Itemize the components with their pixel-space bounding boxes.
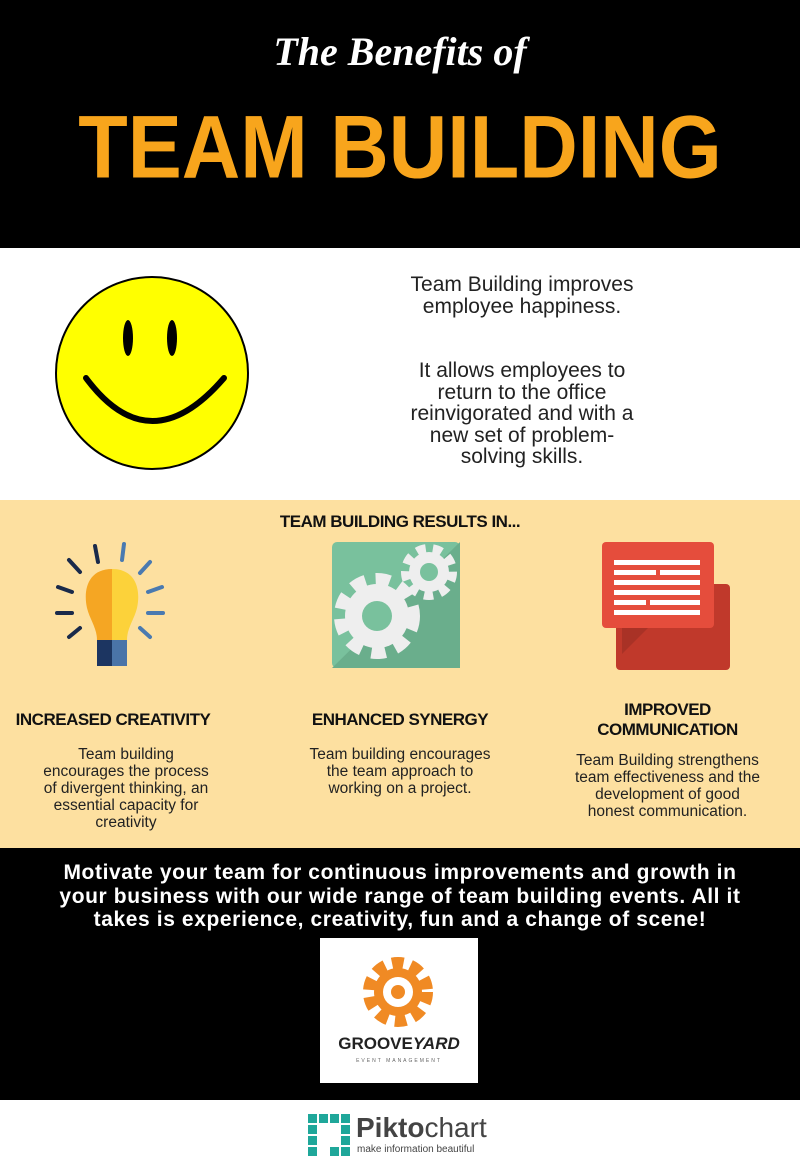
panel: happiness bbox=[0, 248, 800, 500]
column: communication bbox=[575, 700, 760, 820]
column: synergy bbox=[310, 710, 490, 797]
column: creativity: encourages the process bbox=[43, 763, 209, 780]
header bbox=[0, 0, 800, 248]
title: TEAM BUILDING bbox=[78, 98, 722, 197]
text block: solving skills. bbox=[461, 445, 583, 468]
column: creativity: essential capacity for bbox=[54, 797, 198, 814]
text block bbox=[59, 861, 741, 931]
footer: piktochart: Piktochart bbox=[356, 1112, 487, 1143]
text block bbox=[410, 273, 634, 468]
column: communication: team effectiveness and the bbox=[575, 769, 760, 786]
heading: TEAM BUILDING RESULTS IN... bbox=[280, 512, 520, 531]
icon: smiley bbox=[55, 276, 249, 470]
text block: return to the office bbox=[438, 380, 606, 404]
text block: takes is experience, creativity, fun and a change of scene! bbox=[94, 908, 706, 931]
text block: new set of problem- bbox=[430, 424, 614, 446]
icon: light bulb bbox=[55, 542, 165, 666]
column: communication: Team Building strengthens bbox=[576, 752, 759, 769]
column: creativity: INCREASED CREATIVITY bbox=[16, 710, 210, 729]
text block: It allows employees to bbox=[419, 359, 625, 382]
panel: results bbox=[0, 500, 800, 848]
column: communication: COMMUNICATION bbox=[597, 720, 738, 739]
column: communication: IMPROVED bbox=[624, 700, 711, 719]
column: creativity: of divergent thinking, an bbox=[44, 780, 208, 797]
icon: gears bbox=[332, 542, 460, 668]
text block: reinvigorated and with a bbox=[410, 402, 633, 425]
column: synergy: ENHANCED SYNERGY bbox=[312, 710, 488, 729]
text block: your business with our wide range of team building events. All it bbox=[59, 884, 741, 908]
text block: employee happiness. bbox=[423, 294, 621, 318]
logo: grooveyard: EVENT MANAGEMENT bbox=[356, 1058, 442, 1064]
subtitle: The Benefits of bbox=[273, 29, 527, 74]
text block: Team Building improves bbox=[411, 273, 633, 296]
column: communication: development of good bbox=[595, 786, 740, 803]
footer: piktochart: make information beautiful bbox=[357, 1144, 474, 1155]
logo: grooveyard: GROOVEYARD bbox=[338, 1034, 460, 1053]
column: creativity bbox=[16, 710, 210, 831]
text block: Motivate your team for continuous improvements and growth in bbox=[63, 861, 737, 884]
logo: grooveyard bbox=[320, 938, 478, 1083]
column: communication: honest communication. bbox=[588, 803, 747, 820]
footer: piktochart bbox=[308, 1112, 487, 1156]
column: creativity: creativity bbox=[95, 814, 157, 831]
column: creativity: Team building bbox=[78, 746, 174, 763]
panel: call to action bbox=[0, 848, 800, 1100]
icon: chat bbox=[602, 542, 730, 670]
column: synergy: Team building encourages bbox=[310, 746, 490, 763]
column: synergy: working on a project. bbox=[328, 780, 472, 797]
column: synergy: the team approach to bbox=[327, 763, 473, 780]
